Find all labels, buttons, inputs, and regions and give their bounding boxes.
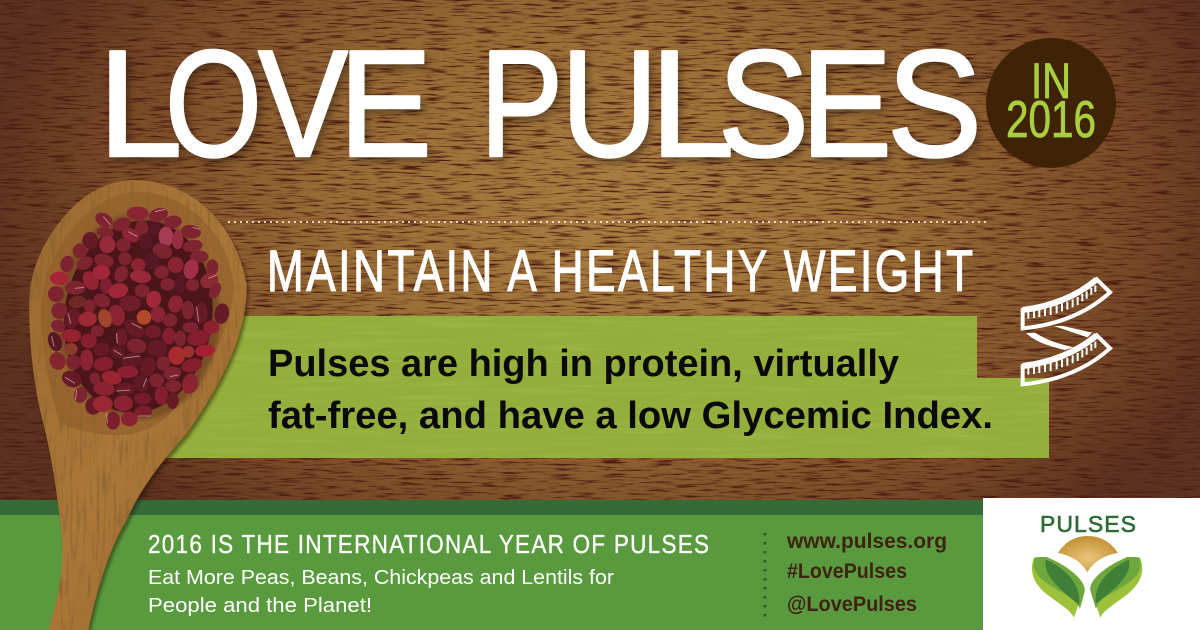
title: E [805,24,896,194]
right leaf [1090,557,1142,618]
panel text: Pulses are high in protein, virtually [268,343,899,385]
title: V [262,24,352,194]
wood background [0,0,1200,500]
badge: in 2016: IN [1031,53,1071,109]
heading: maintain a healthy weight: MAINTAIN A HEALTHY WEIGHT [267,238,973,303]
footer text: Eat More Peas, Beans, Chickpeas and Lentils for [148,566,614,589]
left leaf [1032,557,1085,618]
footer links: www.pulses.org [786,530,947,553]
title: S [722,24,813,194]
icon: measuring tape [1023,279,1110,384]
title [98,19,986,194]
spoon [29,180,247,630]
panel text [268,343,993,437]
logo box [983,498,1200,630]
title: E [339,19,432,189]
title: O [165,19,262,189]
title: P [484,24,567,194]
beans [45,205,231,430]
badge: in 2016: 2016 [1006,91,1096,149]
footer links: #LovePulses [787,560,907,583]
title: E [343,24,436,194]
logo icon [1032,536,1142,618]
title: L [98,19,183,189]
title: U [561,19,658,189]
footer heading: 2016 IS THE INTERNATIONAL YEAR OF PULSES [148,531,709,559]
title: L [654,24,739,194]
title: V [258,19,348,189]
title: L [650,19,735,189]
title: S [887,19,982,189]
logo wordmark: PULSES [1040,511,1136,537]
badge: in 2016 [986,38,1116,168]
green text panel [165,316,1049,458]
title: P [480,19,563,189]
title: E [801,19,892,189]
spoon with beans [20,175,260,630]
title: S [891,24,986,194]
title: U [565,24,662,194]
footer links [786,530,947,616]
dotted divider [228,221,990,223]
panel text: fat-free, and have a low Glycemic Index. [268,395,993,437]
footer text: People and the Planet! [148,594,372,617]
footer band [0,500,1200,630]
title: L [102,24,187,194]
spoon shadow [31,184,249,630]
title: S [718,19,809,189]
footer text [148,566,614,617]
footer links: @LovePulses [787,593,917,616]
title: O [169,24,266,194]
